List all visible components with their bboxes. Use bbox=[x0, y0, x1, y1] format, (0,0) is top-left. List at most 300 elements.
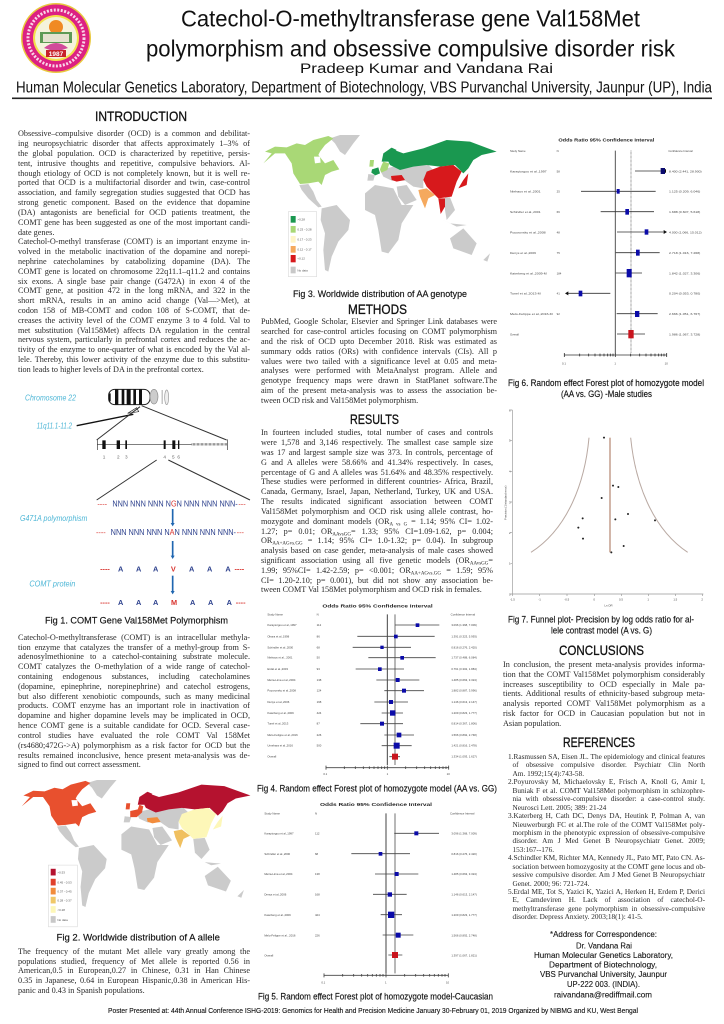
figure 5: forest plot Caucasian: 226 bbox=[315, 933, 320, 937]
address for correspondence: *Address for Correspondence: bbox=[550, 929, 657, 939]
figure 6: forest plot male studies: 75 bbox=[557, 251, 560, 255]
text block: methods: analyses were performed with MetaAnalyst program. Allele and bbox=[261, 366, 497, 375]
address for correspondence bbox=[534, 929, 673, 1000]
legend: AA genotype: 0.17 - 0.23 bbox=[297, 237, 312, 241]
figure 5: forest plot Caucasian: 138 bbox=[315, 872, 320, 876]
text block: introduction part 1: COMT gene is located on chromosome 22q11.1–q11.2 and contains bbox=[18, 267, 250, 276]
figure 5: forest plot Caucasian: 168 bbox=[315, 893, 320, 897]
text block: conclusions: increases susceptibility to OCD especially in Male pa- bbox=[503, 680, 705, 689]
caption: figure 7: Fig 7. Funnel plot- Precision by log odds ratio for al- bbox=[508, 614, 694, 626]
figure 6: forest plot male studies: Tunel et al.,2013-M bbox=[510, 292, 541, 296]
figure 6: forest plot male studies: Poyurovsky et al.,2008 bbox=[510, 230, 546, 234]
text block: introduction part 1: though etiology of OCD is not completely known, but it is well re- bbox=[18, 169, 250, 178]
figure 5: forest plot Caucasian: 1.566 (0.892, 2.748) bbox=[451, 933, 477, 937]
DNA sequence A: ---- bbox=[96, 528, 106, 537]
figure 5: forest plot Caucasian: 1.146 (0.613, 2.147) bbox=[451, 893, 477, 897]
figure 4: forest plot AA vs GG: 87 bbox=[317, 722, 320, 726]
protein sequence valine: A bbox=[225, 565, 231, 574]
heading: methods: METHODS bbox=[348, 301, 407, 317]
figure 6: forest plot male studies: 8.400 (2.441, 28.900) bbox=[669, 169, 702, 173]
figure 4: forest plot AA vs GG: Karayiorgou et al.,1997 bbox=[267, 623, 297, 627]
figure 6: forest plot male studies: Denys et al.,2006 bbox=[510, 251, 536, 255]
protein sequence methionine: A bbox=[118, 598, 124, 607]
figure 6: forest plot male studies: 0.204 (0.053, 0.780) bbox=[669, 292, 700, 296]
text block: introduction part 2: hence COMT gene is a suitable candidate for OCD. Several case- bbox=[18, 721, 250, 730]
text block: results: mozygote and dominant models (ORA vs G = 1.14; 95% CI= 1.02- bbox=[261, 517, 493, 527]
text block: references: 4.Schindler KM, Richter MA, Kennedy JL, Pato MT, Pato CN. As- bbox=[508, 853, 705, 862]
text block: methods: values were two tailed with a significance level at 0.05 and meta- bbox=[261, 357, 497, 366]
caption: figure 4: Fig 4. Random effect Forest plot of homozygote model (AA vs. GG) bbox=[257, 784, 497, 794]
caption: figure 3: Fig 3. Worldwide distribution of AA genotype bbox=[293, 289, 467, 300]
text block: results: significant association using all five genetic models (ORAAvsGG= bbox=[261, 556, 493, 566]
text block: introduction part 1: ing neuropsychiatric disorder that affects approximately 1–3% of bbox=[18, 139, 250, 148]
figure 6: forest plot male studies: N bbox=[557, 149, 559, 153]
text block: conclusions: analysis reported COMT Val158Met polymorphism as a bbox=[503, 699, 705, 708]
authors: Pradeep Kumar and Vandana Rai bbox=[300, 61, 553, 76]
legend: AA genotype: 0.23 - 0.28 bbox=[297, 227, 312, 231]
protein sequence methionine: A bbox=[190, 598, 196, 607]
caption: figure 7 bbox=[508, 614, 694, 636]
protein sequence methionine: A bbox=[227, 598, 233, 607]
figure 5: forest plot Caucasian: 68 bbox=[315, 852, 319, 856]
figure 7: funnel plot: 1 bbox=[647, 597, 649, 601]
figure 7: funnel plot: 0 bbox=[593, 597, 595, 601]
figure 4: forest plot AA vs GG: 1.421 (0.816, 2.478) bbox=[451, 744, 477, 748]
text block: methods bbox=[261, 317, 497, 405]
figure 4: forest plot AA vs GG: Niehaus et al., 2001 bbox=[267, 656, 293, 660]
figure 4: forest plot AA vs GG: Meira-Lima et al.,2004 bbox=[267, 678, 296, 682]
figure 5: forest plot Caucasian: N bbox=[315, 811, 317, 815]
figure 4: forest plot AA vs GG: 168 bbox=[317, 700, 322, 704]
text block: results: Val158Met polymorphism and OCD risk using allele contrast, ho- bbox=[261, 507, 493, 516]
figure 4: forest plot AA vs GG: 0.1 bbox=[323, 772, 328, 776]
figure 6: forest plot male studies: Confidence Interval bbox=[668, 149, 693, 153]
figure 4: forest plot AA vs GG: 1 bbox=[387, 772, 389, 776]
protein sequence methionine: ---- bbox=[100, 598, 110, 607]
text block: results: Canada, Germany, Israel, Japan, Netherland, Turkey, UK and USA. bbox=[261, 487, 493, 496]
figure 4: forest plot AA vs GG: 1.209 (0.823, 1.777) bbox=[451, 711, 477, 715]
protein sequence valine bbox=[100, 565, 245, 574]
text block: introduction part 1: strong genetic component. Based on the evidence that dopamine bbox=[18, 198, 250, 207]
figure 1: COMT gene diagram bbox=[20, 389, 250, 607]
figure 4: forest plot AA vs GG: 226 bbox=[317, 733, 322, 737]
logo: university seal: 1987 bbox=[49, 51, 64, 58]
figure 4: forest plot AA vs GG: 3.096 (1.368, 7.009) bbox=[451, 623, 477, 627]
protein sequence methionine: A bbox=[153, 598, 159, 607]
figure 4: forest plot AA vs GG: 10 bbox=[447, 772, 450, 776]
text block: introduction part 2: (rs4680;472G->A) polymorphism as a risk factor for OCD but the bbox=[18, 741, 250, 750]
figure 5: forest plot Caucasian: 0.816 (0.276, 2.420) bbox=[451, 852, 477, 856]
text block: methods: and the risk of OCD upto December 2018. Risk was estimated as bbox=[261, 337, 497, 346]
figure 5: forest plot Caucasian: 424 bbox=[315, 913, 320, 917]
figure 4: forest plot AA vs GG: 1.391 (0.323, 5.993) bbox=[451, 634, 477, 638]
figure 4: forest plot AA vs GG: 500 bbox=[317, 744, 322, 748]
text block: introduction part 2: dopamine and higher dopamine levels may be implicated in OCD, bbox=[18, 711, 250, 720]
figure 4: forest plot AA vs GG: Poyurovsky et al.,2008 bbox=[267, 689, 296, 693]
figure 6: forest plot male studies: 1.986 (1.067, 3.728) bbox=[669, 332, 700, 336]
figure 5: forest plot Caucasian bbox=[264, 802, 477, 984]
figure 6: forest plot male studies: Melo-Felippe et al.,2016-M bbox=[510, 312, 553, 316]
text block: references: 3.Katerberg H, Cath DC, Denys DA, Heutink P, Polman A, van bbox=[508, 811, 705, 820]
figure 4: forest plot AA vs GG: Umehara et al.,2016 bbox=[267, 744, 293, 748]
figure 7: funnel plot: -1.5 bbox=[510, 597, 515, 601]
protein sequence methionine: ---- bbox=[236, 598, 246, 607]
caption: figure 6 bbox=[508, 378, 704, 400]
figure 4: forest plot AA vs GG: 0.761 (0.302, 1.884) bbox=[451, 667, 477, 671]
text block: introduction part 2: adenosylmethionine to a catechol-containing substrate molecule. bbox=[18, 652, 250, 661]
text block: methods: searched for case-control articles focusing on COMT polymorphism bbox=[261, 327, 497, 336]
text block: Met allele frequency: populations studied, frequency of Met allele is reported 0.56 in bbox=[18, 957, 250, 966]
text block: introduction part 1: creases the activity level of the COMT enzyme 3 to 4 fold. Val to bbox=[18, 316, 250, 325]
text block: Met allele frequency: The frequency of the mutant Met allele vary greatly among the bbox=[18, 947, 250, 956]
figure 4: forest plot AA vs GG: Overall bbox=[267, 755, 277, 759]
protein label: COMT protein bbox=[29, 579, 76, 588]
protein sequence methionine: M bbox=[171, 598, 177, 607]
figure 7: funnel plot: 2 bbox=[701, 597, 703, 601]
figure 6: forest plot male studies: 1 bbox=[614, 362, 616, 366]
text block: conclusions: tients. Additional results of ethnicity-based subgroup meta- bbox=[503, 689, 705, 698]
figure 6: forest plot male studies: Karayiorgou et al.,1997 bbox=[510, 169, 547, 173]
figure 3: world map of AA genotype bbox=[263, 135, 497, 277]
figure 6: forest plot male studies: 184 bbox=[557, 271, 562, 275]
legend: A allele: <0.28 bbox=[57, 908, 65, 912]
figure 6: forest plot male studies: Odds Ratio 95% Confidence Interval bbox=[558, 138, 655, 144]
figure 4: forest plot AA vs GG: 1.334 (1.093, 1.627) bbox=[451, 755, 477, 759]
text block: results: G and A alleles were 58.66% and 41.34% respectively. In cases, bbox=[261, 458, 493, 467]
figure 7: funnel plot: Precision (1/standard error) bbox=[504, 486, 508, 520]
text block: references: 153:167--176. bbox=[512, 845, 554, 854]
figure 6: forest plot male studies: 1.688 (0.607, 5.618) bbox=[669, 210, 700, 214]
text block: references: Buniak F et al. COMT Val158Met polymorphism in schizophre- bbox=[512, 786, 705, 795]
text block: references: disorder. Am J Med Genet B Neuropsychiatr Genet. 2009; bbox=[512, 836, 705, 845]
heading: conclusions: CONCLUSIONS bbox=[559, 642, 644, 658]
caption: figure 2: Fig 2. Worldwide distribution of A allele bbox=[56, 932, 220, 944]
text block: references: of obsessive compulsive disorder. Psychiatr Clin North bbox=[512, 760, 705, 769]
text block: introduction part 1: tent, intrusive thoughts and repetitive, compulsive behaviors. Al- bbox=[18, 159, 250, 168]
figure 5: forest plot Caucasian: 1.209 (0.823, 1.777) bbox=[451, 913, 477, 917]
text block: introduction part 1 bbox=[18, 129, 250, 374]
text block: results: 1.27; p= 0.01; ORAAvsGG= 1.33; 95% CI=1.09-1.62, p= 0.004; bbox=[261, 527, 493, 537]
legend: AA genotype: >0.28 bbox=[297, 217, 305, 221]
figure 4: forest plot AA vs GG: 1.737 (0.488, 6.084) bbox=[451, 656, 477, 660]
text block: introduction part 2: (dopamine, epinephrine, norepinephrine) and catechol estrogens, bbox=[18, 682, 250, 691]
figure 6: forest plot male studies bbox=[510, 138, 702, 366]
text block: introduction part 1: the global population. OCD is characterized by repetitive, persis- bbox=[18, 149, 250, 158]
figure 6: forest plot male studies: 2.718 (1.016, 7.268) bbox=[669, 251, 700, 255]
figure 7: funnel plot: 2 bbox=[509, 531, 511, 535]
text block: results: In fourteen included studies, total number of cases and controls bbox=[261, 428, 493, 437]
caption: figure 1: Fig 1. COMT Gene Val158Met Polymorphism bbox=[45, 616, 228, 626]
text block: references: nia with obsessive-compulsive disorder: a case-control study. bbox=[512, 794, 705, 803]
text block: conclusions: Asian population. bbox=[503, 719, 561, 728]
protein sequence valine: A bbox=[118, 565, 124, 574]
legend: AA genotype bbox=[288, 212, 317, 277]
text block: introduction part 2: results remained inconclusive, hence present meta-analysis was de- bbox=[18, 751, 250, 760]
figure 4: forest plot AA vs GG: Erdal et al.,2003 bbox=[267, 667, 288, 671]
figure 4: forest plot AA vs GG: 93 bbox=[317, 667, 320, 671]
text block: introduction part 1: COMT gene, at position 472 in the long mRNA, and 322 in the bbox=[18, 286, 250, 295]
figure 4: forest plot AA vs GG: 112 bbox=[317, 623, 322, 627]
text block: introduction part 1: volved in the metabolic inactivation of the dopamine and norepi- bbox=[18, 247, 250, 256]
figure 6: forest plot male studies: 41 bbox=[557, 292, 560, 296]
caption: figure 5: Fig 5. Random effect Forest plot of homozygote model-Caucasian bbox=[258, 992, 493, 1002]
figure 5: forest plot Caucasian: Schindler et al.,2000 bbox=[264, 852, 291, 856]
address for correspondence: Dr. Vandana Rai bbox=[576, 940, 632, 950]
figure 4: forest plot AA vs GG: Confidence Interval bbox=[451, 612, 475, 616]
text block: introduction part 1: nervous system, particularly in prefrontal cortex and reduces the ac- bbox=[18, 335, 250, 344]
text block: references: Am. 1992;15(4):743-58. bbox=[512, 769, 584, 778]
protein sequence valine: V bbox=[171, 565, 176, 574]
text block: introduction part 2: tion enzyme that catalyzes the transfer of a methyl-group from S- bbox=[18, 643, 250, 652]
text block: references: E, Camdeviren H. Lack of association of catechol-O- bbox=[512, 895, 705, 904]
text block: introduction part 1: Obsessive–compulsive disorder (OCD) is a common and debilitat- bbox=[18, 129, 250, 138]
text block: conclusions: risk factor for OCD in Caucasian population but not in bbox=[503, 709, 705, 718]
figure 7: funnel plot: 0.5 bbox=[619, 597, 623, 601]
text block: references: 5.Erdal ME, Tot S, Yazici K, Yazici A, Herken H, Erdem P, Derici bbox=[508, 887, 705, 896]
figure 5: forest plot Caucasian: 0.1 bbox=[321, 980, 326, 984]
figure 7: funnel plot: 6 bbox=[509, 408, 511, 412]
figure 4: forest plot AA vs GG: 138 bbox=[317, 678, 322, 682]
address for correspondence: Department of Biotechnology, bbox=[549, 960, 657, 970]
gene structure with exons: 2 bbox=[117, 454, 120, 459]
caption: figure 7: lele contrast model (A vs. G) bbox=[551, 626, 652, 636]
title: Catechol-O-methyltransferase gene Val158Met bbox=[181, 6, 641, 32]
figure 7: funnel plot: 3 bbox=[509, 500, 511, 504]
figure 4: forest plot AA vs GG: 1.882 (0.887, 3.996) bbox=[451, 689, 477, 693]
figure 5: forest plot Caucasian: Confidence Interval bbox=[450, 811, 475, 815]
gene structure with exons: 6 bbox=[177, 454, 180, 459]
protein sequence valine: ---- bbox=[100, 565, 110, 574]
text block: introduction part 1: codon 158 of MB-COMT and codon 108 of S-COMT, that de- bbox=[18, 306, 250, 315]
protein sequence valine: A bbox=[207, 565, 213, 574]
figure 7: funnel plot: Ln OR bbox=[604, 604, 613, 608]
caption: figure 6: (AA vs. GG) -Male studies bbox=[561, 389, 652, 400]
gene structure with exons: 3 bbox=[125, 454, 128, 459]
DNA sequence A: NNN NNN NNN NAN NNN NNN NNN- bbox=[111, 528, 236, 537]
figure 4: forest plot AA vs GG: N bbox=[317, 612, 319, 616]
text block: introduction part 1: date genes. bbox=[18, 228, 54, 237]
text block: introduction part 1: met substitution (Val158Met) affects DA regulation in the central bbox=[18, 326, 250, 335]
polymorphism label: G471A polymorphism bbox=[20, 514, 88, 523]
figure 4: forest plot AA vs GG: 0.816 (0.276, 2.420) bbox=[451, 645, 477, 649]
figure 7: funnel plot: 1 bbox=[509, 562, 511, 566]
text block: references: Nieuwerburgh FC et al.The role of the COMT Val158Met poly- bbox=[512, 820, 705, 828]
figure 7: funnel plot: 1.5 bbox=[673, 597, 678, 601]
gene structure with exons bbox=[97, 439, 227, 459]
figure 4: forest plot AA vs GG: Melo-Felippe et al.,2016 bbox=[267, 733, 298, 737]
text block: results: CI= 1.20-2.10; p= 0.001), but did not show any association be- bbox=[261, 576, 493, 585]
text block: references: methyltransferase gene polymorphism in obsessive-compulsive bbox=[512, 904, 705, 913]
figure 4: forest plot AA vs GG: 50 bbox=[317, 656, 320, 660]
arrows between sequences bbox=[171, 509, 175, 594]
text block: references: Neurosci Lett. 2005; 389: 21-24 bbox=[512, 803, 606, 812]
figure 6: forest plot male studies: Study Name bbox=[510, 149, 526, 153]
figure 7: funnel plot: -0.5 bbox=[564, 597, 570, 601]
text block: results: were 1,578 and 3,146 respectively. The smallest case sample size bbox=[261, 438, 493, 447]
text block: introduction part 1: association, and family segregation studies suggested that OCD has bbox=[18, 188, 250, 197]
protein sequence valine: A bbox=[136, 565, 142, 574]
figure 4: forest plot AA vs GG: Odds Ratio 95% Confidence Interval bbox=[322, 603, 433, 609]
protein sequence methionine bbox=[100, 598, 246, 607]
text block: introduction part 2: containing endogenous substances, including catecholamines bbox=[18, 672, 250, 681]
address for correspondence: Human Molecular Genetics Laboratory, bbox=[534, 950, 673, 960]
figure 6: forest plot male studies: 1.125 (0.209, 6.046) bbox=[669, 190, 700, 194]
figure 6: forest plot male studies: 10 bbox=[665, 362, 668, 366]
figure 6: forest plot male studies: 25 bbox=[557, 190, 560, 194]
text block: introduction part 1: nephrine catecholamines by catabolizing dopamine (DA). The bbox=[18, 257, 250, 266]
figure 4: forest plot AA vs GG bbox=[267, 603, 477, 776]
figure 6: forest plot male studies: Niehaus et al.,2001 bbox=[510, 190, 541, 194]
figure 6: forest plot male studies: 58 bbox=[557, 169, 560, 173]
text block: conclusions bbox=[503, 660, 705, 728]
DNA sequence G: NNN NNN NNN NGN NNN NNN NNN- bbox=[112, 500, 238, 509]
figure 5: forest plot Caucasian: Meira-Lima et al.,2004 bbox=[264, 872, 293, 876]
figure 5: forest plot Caucasian: Karayiorgou et al.,1997 bbox=[264, 832, 294, 836]
text block: Met allele frequency: 0.35 in Japanese, 0.64 in European Hispanic,0.38 in American His- bbox=[18, 976, 250, 985]
text block: references: 2.Poyurovsky M, Michaelovsky E, Frisch A, Knoll G, Amir I, bbox=[508, 777, 705, 786]
figure 4: forest plot AA vs GG: Denys et al.,2006 bbox=[267, 700, 290, 704]
text block: introduction part 1: Catechol-O-methyl transferase (COMT) is an important enzyme in- bbox=[18, 237, 250, 246]
text block: methods: summary odds ratios (ORs) with confidence intervals (CIs). All p bbox=[261, 347, 497, 356]
DNA sequence A: --- bbox=[237, 528, 245, 537]
figure 5: forest plot Caucasian: Melo-Felippe et al., 2016 bbox=[264, 933, 296, 937]
figure 5: forest plot Caucasian: Katerberg et al.,2009 bbox=[264, 913, 291, 917]
text block: introduction part 2: signed to find out correct assessment. bbox=[18, 760, 141, 769]
text block: conclusions: tion that the COMT Val158Met polymorphism considerably bbox=[503, 670, 705, 679]
text block: introduction part 2: products. COMT enzyme has an important role in inactivation of bbox=[18, 701, 250, 710]
text block: Met allele frequency bbox=[18, 947, 250, 995]
text block: results: 1.99; 95%CI= 1.42-2.59; p= <0.001; ORAA+AGvs.GG = 1.59; 95% bbox=[261, 566, 493, 576]
figure 4: forest plot AA vs GG: Katerberg et al.,2009 bbox=[267, 711, 294, 715]
figure 5: forest plot Caucasian: 3.096 (1.368, 7.009) bbox=[451, 832, 477, 836]
address for correspondence: UP-222 003. (INDIA). bbox=[567, 979, 640, 989]
text block: introduction part 1: ported that OCD is a multifactorial disorder and twin, case-control bbox=[18, 178, 250, 187]
text block: Met allele frequency: American,0.5 in European,0.27 in Chinese, 0.31 in Han Chinese bbox=[18, 966, 250, 975]
figure 4: forest plot AA vs GG: Schindler et al.,2000 bbox=[267, 645, 294, 649]
legend: A allele bbox=[48, 865, 77, 927]
text block: results: percentage of G and A alleles was 51.64% and 48.35% respectively. bbox=[261, 468, 493, 477]
heading: results: RESULTS bbox=[350, 411, 399, 427]
text block: introduction part 1: short mRNA, results in an amino acid change (Val—>Met), at bbox=[18, 296, 250, 305]
text block: references: 1.Rasmussen SA, Eisen JL. The epidemiology and clinical features bbox=[508, 752, 705, 761]
legend: A allele: 0.45 - 0.53 bbox=[57, 880, 72, 884]
text block: introduction part 1: six exons. A single base pair change (G472A) in exon 4 of the bbox=[18, 277, 250, 286]
text block: introduction part 1: lele. Thereby, this lower activity of the enzyme due to this substitu- bbox=[18, 355, 250, 364]
legend: A allele: No data bbox=[57, 918, 68, 922]
text block: methods: aim of the present meta-analysis was to assess the association be- bbox=[261, 386, 497, 395]
title bbox=[146, 6, 675, 62]
protein sequence methionine: A bbox=[136, 598, 142, 607]
figure 4: forest plot AA vs GG: 1.146 (0.613, 2.147) bbox=[451, 700, 477, 704]
text block: references: sociation between homozygosity at the COMT gene locus and ob- bbox=[512, 862, 706, 871]
figure 6: forest plot male studies: Katerberg et al.,2009-M bbox=[510, 271, 547, 275]
legend: A allele: 0.28 - 0.37 bbox=[57, 898, 72, 902]
title: polymorphism and obsessive compulsive disorder risk bbox=[146, 36, 675, 62]
figure 7: funnel plot: 4 bbox=[509, 470, 511, 474]
heading: references: REFERENCES bbox=[563, 734, 635, 750]
text block: results: analysis based on case gender, meta-analysis of male cases showed bbox=[261, 546, 493, 555]
figure 5: forest plot Caucasian: 1.485 (0.663, 3.324) bbox=[451, 872, 477, 876]
locus label: 11q11.1-11.2 bbox=[37, 421, 72, 430]
DNA sequence G: --- bbox=[238, 500, 246, 509]
figure 6: forest plot male studies: 1.842 (1.027, 3.306) bbox=[669, 271, 700, 275]
figure 5: forest plot Caucasian: Denys et al.,2006 bbox=[264, 893, 287, 897]
figure 6: forest plot male studies: 92 bbox=[557, 312, 560, 316]
figure 4: forest plot AA vs GG: 0.814 (0.367, 1.806) bbox=[451, 722, 477, 726]
figure 7: funnel plot: -1 bbox=[538, 597, 541, 601]
text block: introduction part 1: COMT gene has been suggested as one of the most important candi- bbox=[18, 218, 250, 227]
figure 4: forest plot AA vs GG: Ohara et al.,1998 bbox=[267, 634, 290, 638]
address for correspondence: raivandana@rediffmail.com bbox=[554, 990, 652, 1000]
figure 6: forest plot male studies: 48 bbox=[557, 230, 560, 234]
figure 5: forest plot Caucasian: 1 bbox=[385, 980, 387, 984]
text block: results bbox=[261, 428, 493, 594]
text block: results: ORAA+AGvs.GG = 1.14; 95% CI= 1.0-1.32; p= 0.04). In subgroup bbox=[261, 536, 493, 547]
text block: conclusions: In conclusion, the present meta-analysis provides informa- bbox=[503, 660, 705, 669]
figure 6: forest plot male studies: Schindler et al.,2001 bbox=[510, 210, 541, 214]
figure 5: forest plot Caucasian: Study Name bbox=[264, 811, 280, 815]
figure 5: forest plot Caucasian: 1.397 (1.067, 1.821) bbox=[451, 953, 477, 957]
text block: introduction part 2 bbox=[18, 633, 250, 769]
figure 7: funnel plot bbox=[504, 408, 703, 608]
text block: introduction part 2: Catechol-O-methyltransferase (COMT) is an intracellular methyla- bbox=[18, 633, 250, 642]
text block: references: Genet. 2000; 96: 721-724. bbox=[512, 879, 589, 888]
figure 6: forest plot male studies: Overall bbox=[510, 332, 519, 336]
protein sequence valine: ---- bbox=[234, 565, 245, 574]
chromosome ideogram bbox=[109, 389, 169, 413]
legend: A allele: 0.37 - 0.45 bbox=[57, 889, 72, 893]
figure 6: forest plot male studies: 4.000 (1.066, 15.012) bbox=[669, 230, 702, 234]
text block: methods: genotype frequency maps were drawn in StatPlanet software.The bbox=[261, 376, 497, 385]
text block: references: disorder. Depress Anxiety. 2003;18(1): 41-5. bbox=[512, 912, 643, 921]
text block: results: The results indicated significant association between COMT bbox=[261, 497, 493, 506]
chromosome 22 label: Chromosome 22 bbox=[25, 393, 76, 402]
figure 5: forest plot Caucasian: Overall bbox=[264, 953, 274, 957]
protein sequence valine: A bbox=[153, 565, 159, 574]
protein sequence valine: A bbox=[189, 565, 195, 574]
figure 4: forest plot AA vs GG: 86 bbox=[317, 634, 320, 638]
text block: introduction part 2: control studies have evaluated the role COMT Val 158Met bbox=[18, 731, 250, 740]
DNA sequence G: ---- bbox=[97, 500, 108, 509]
legend: A allele: >0.53 bbox=[57, 870, 65, 874]
figure 2: world map of A allele bbox=[22, 780, 250, 927]
figure 4: forest plot AA vs GG: 1.485 (0.663, 3.324) bbox=[451, 678, 477, 682]
text block: introduction part 2: but also different xenobiotic compounds, such as many medicinal bbox=[18, 692, 250, 701]
figure 4: forest plot AA vs GG: 68 bbox=[317, 645, 320, 649]
legend: AA genotype: No data bbox=[297, 268, 308, 272]
figure 4: forest plot AA vs GG: 1.566 (0.892, 2.748) bbox=[451, 733, 477, 737]
text block: Met allele frequency: panic and 0.43 in Spanish populations. bbox=[18, 986, 145, 995]
text block: references: morphism in the phenotypic expression of obsessive-compulsive bbox=[512, 828, 705, 837]
figure 5: forest plot Caucasian: 112 bbox=[315, 832, 320, 836]
text block: methods: PubMed, Google Scholar, Elsevier and Springer Link databases were bbox=[261, 317, 497, 326]
figure 7: funnel plot: 0 bbox=[509, 592, 511, 596]
text block: introduction part 1: tion leads to higher levels of DA in the prefrontal cortex. bbox=[18, 365, 204, 374]
figure 6: forest plot male studies: 66 bbox=[557, 210, 560, 214]
figure 7: funnel plot: 5 bbox=[509, 439, 511, 443]
text block: introduction part 1: tivity of the enzyme to one-quarter of what is encoded by the Val al- bbox=[18, 345, 250, 354]
figure 5: forest plot Caucasian: 10 bbox=[446, 980, 450, 984]
heading: introduction: INTRODUCTION bbox=[95, 108, 187, 124]
locus pointer bbox=[77, 414, 133, 426]
figure 6: forest plot male studies: 0.1 bbox=[562, 362, 566, 366]
address for correspondence: VBS Purvanchal University, Jaunpur bbox=[540, 969, 667, 979]
logo: university seal bbox=[21, 3, 91, 73]
protein sequence methionine: A bbox=[208, 598, 214, 607]
legend: AA genotype: <0.12 bbox=[297, 257, 305, 261]
figure 6: forest plot male studies: 2.666 (1.051, 6.767) bbox=[669, 312, 700, 316]
legend: AA genotype: 0.12 - 0.17 bbox=[297, 247, 312, 251]
